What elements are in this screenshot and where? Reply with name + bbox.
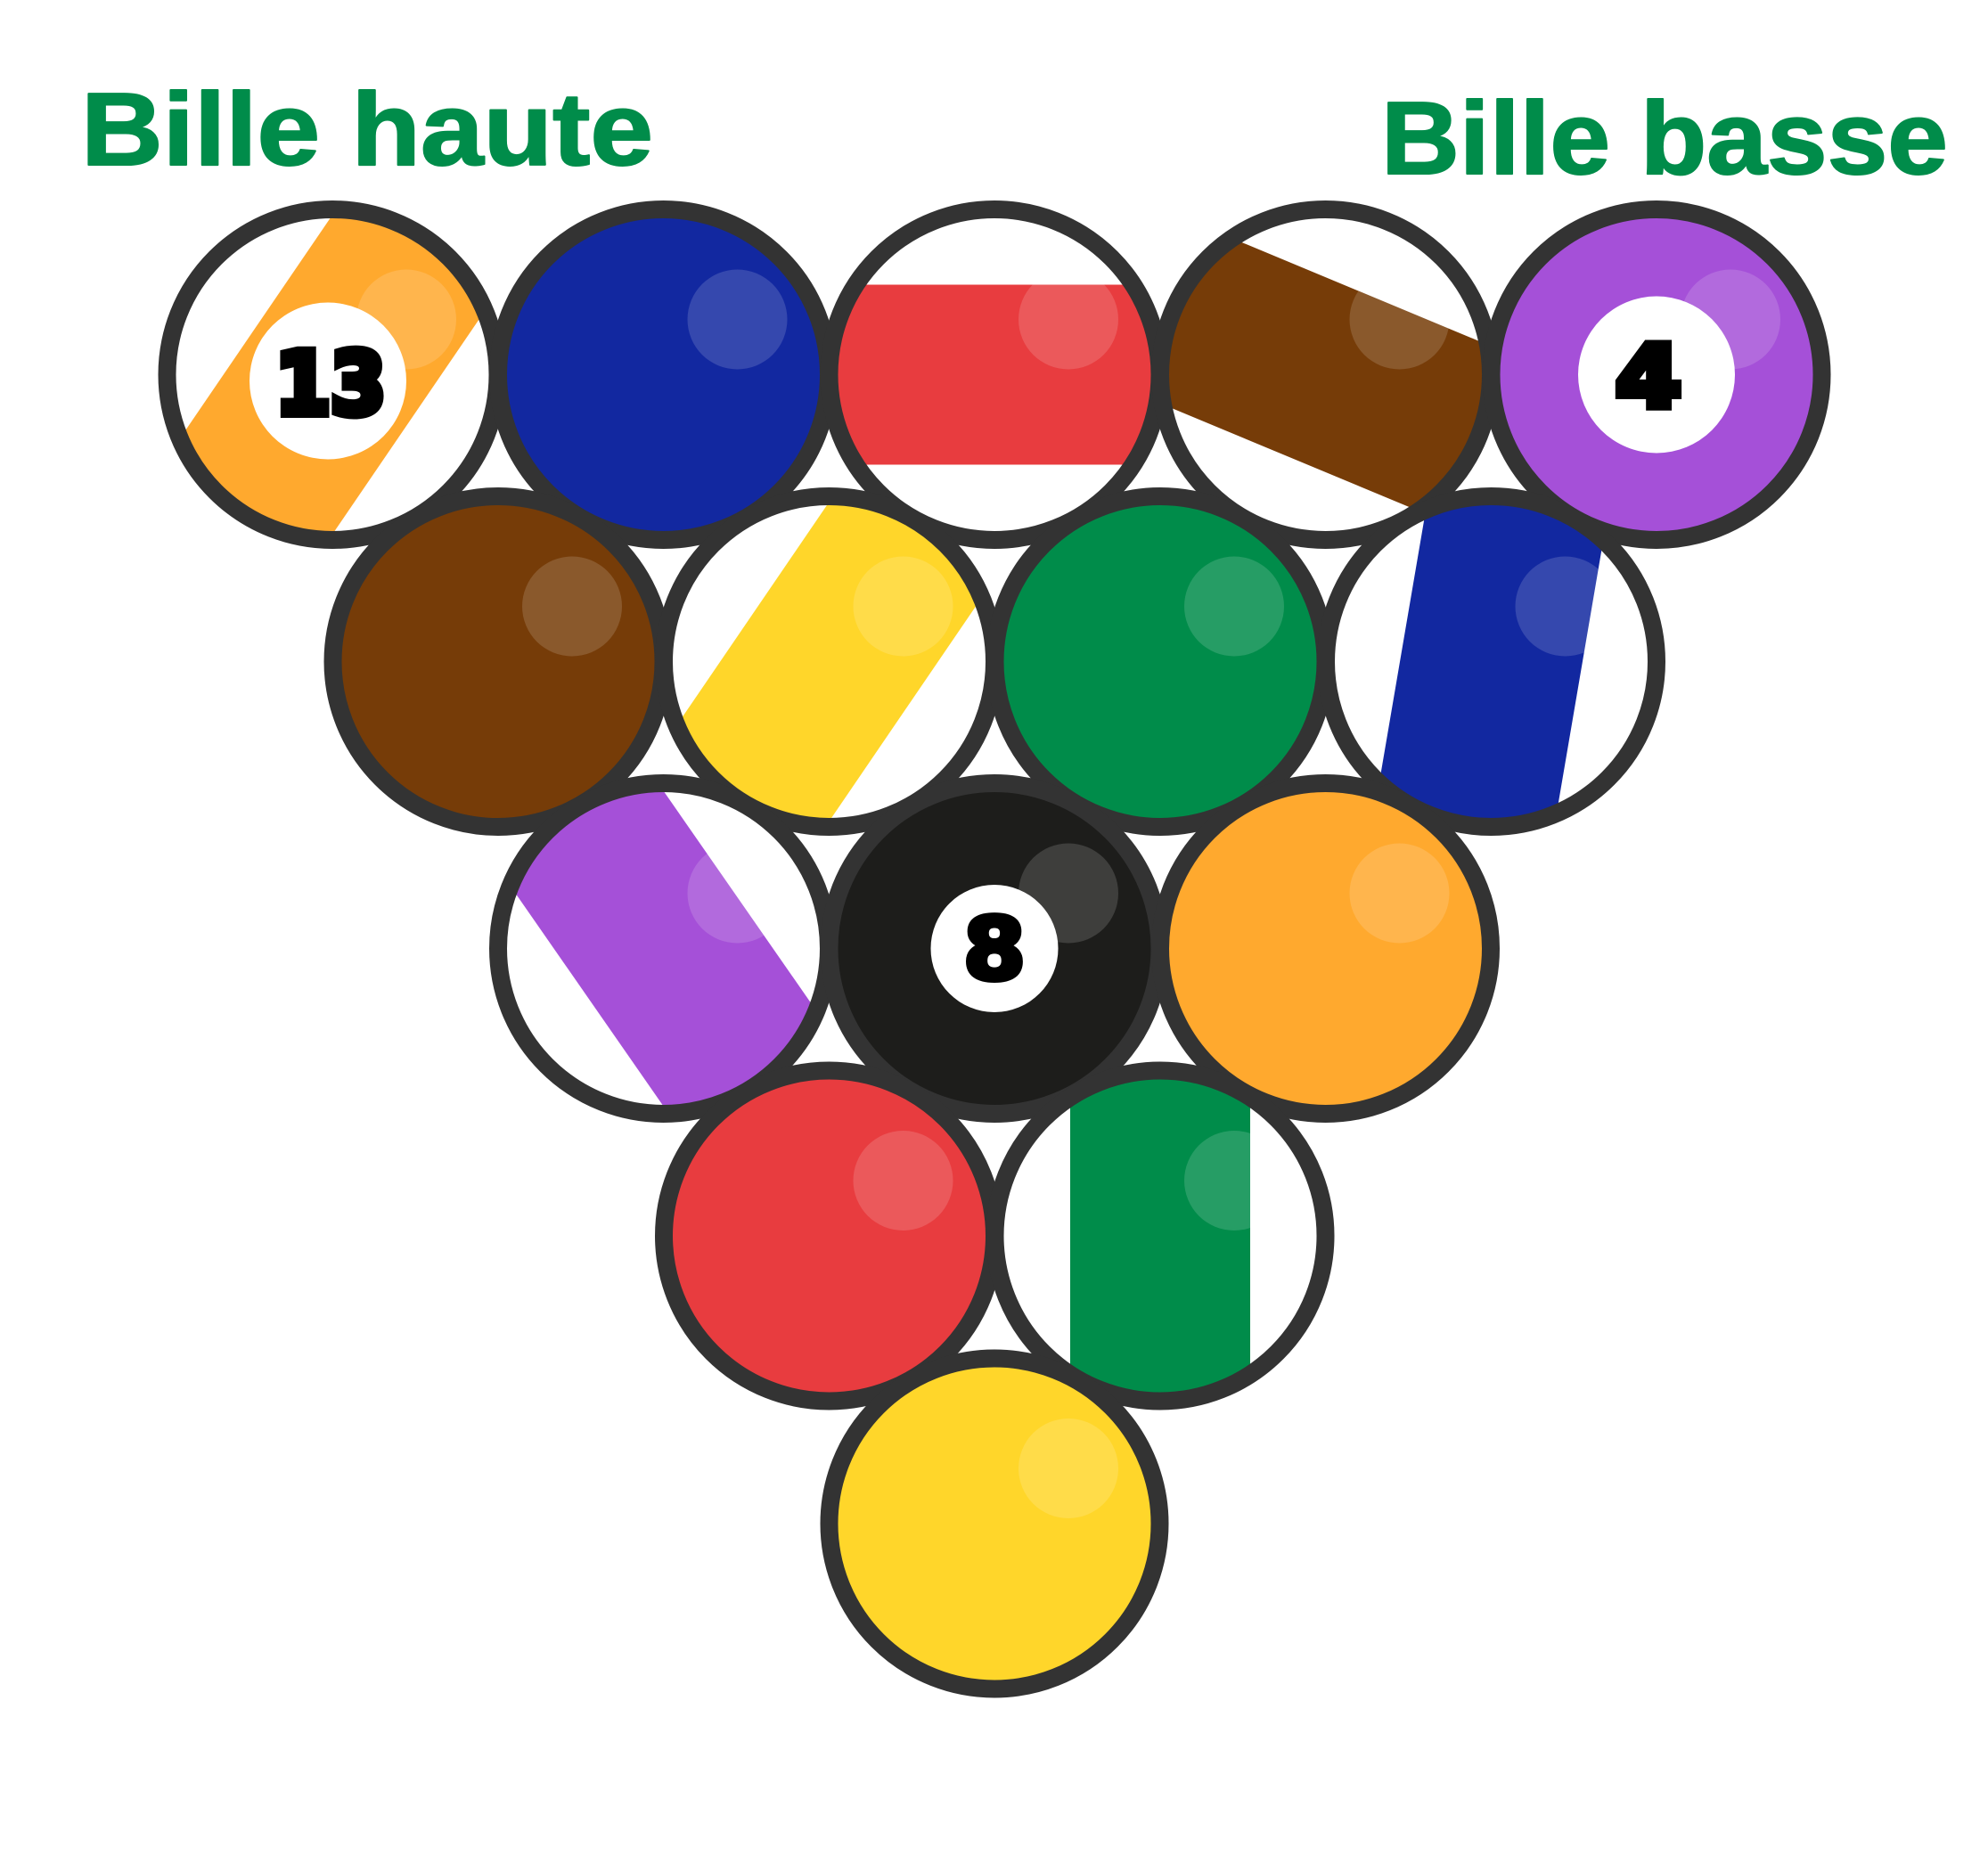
ball: black 8: 8 xyxy=(963,900,1026,1000)
ball: solid green xyxy=(994,496,1326,827)
ball: yellow striped xyxy=(663,487,994,836)
ball: solid purple 4: 4 xyxy=(1616,328,1681,428)
ball: orange striped 13 xyxy=(159,200,498,549)
heading: Bille basse: Bille basse xyxy=(1381,80,1948,196)
ball: blue striped xyxy=(1326,487,1665,836)
ball: red striped xyxy=(829,200,1160,549)
ball: black 8 xyxy=(829,783,1160,1114)
ball: green striped xyxy=(994,1062,1335,1410)
ball: solid red xyxy=(664,1071,994,1401)
ball: purple striped xyxy=(489,774,829,1123)
ball: solid blue xyxy=(498,209,829,540)
ball: orange striped 13: 13 xyxy=(275,334,386,434)
ball: solid purple 4 xyxy=(1492,209,1821,540)
heading: Bille haute: Bille haute xyxy=(81,71,653,187)
ball: solid yellow xyxy=(829,1358,1160,1689)
ball: solid orange xyxy=(1160,783,1491,1114)
ball: brown striped xyxy=(1160,200,1492,549)
ball: solid brown xyxy=(333,496,663,827)
